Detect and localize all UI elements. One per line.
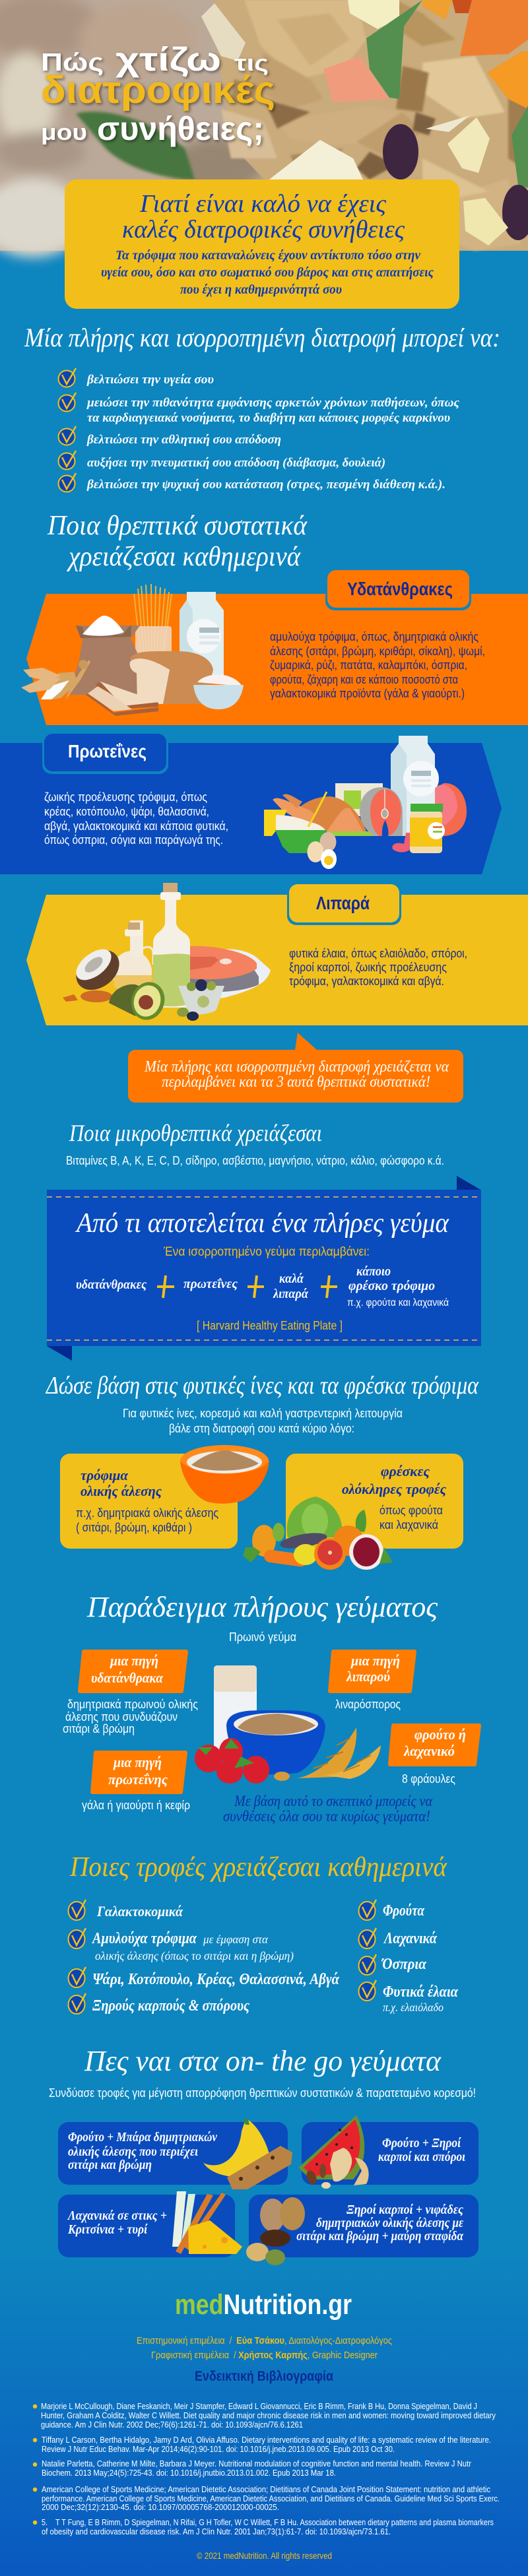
tag: protein source: μια πηγή bbox=[113, 1754, 162, 1770]
card text bbox=[67, 2208, 167, 2237]
text: carbohydrates bbox=[270, 630, 485, 700]
text: protein example: γάλα ή γιαούρτι ή κεφίρ bbox=[82, 1799, 190, 1812]
illustration: fat foods bbox=[63, 883, 271, 1024]
card text: καρποί και σπόροι bbox=[378, 2150, 465, 2164]
label: carbohydrates bbox=[325, 570, 471, 610]
icon: check bbox=[69, 1928, 86, 1948]
title: χτίζω bbox=[116, 41, 221, 78]
item: Ψάρι, Κοτόπουλο, Κρέας, Θαλασσινά, Αβγά bbox=[92, 1971, 340, 1988]
heading: on-the-go meals: Πες ναι στα on- the go γεύματα bbox=[84, 2045, 442, 2077]
panel: why good habits bbox=[65, 179, 459, 309]
ribbon subtitle: Ένα ισορροπημένο γεύμα περιλαμβάνει: bbox=[163, 1245, 370, 1259]
icon: check bbox=[58, 368, 76, 387]
hero photo: cereal flakes with fruit bbox=[0, 0, 528, 257]
panel heading: τρόφιμα bbox=[81, 1467, 129, 1483]
icon: cereal bowl bbox=[180, 1445, 269, 1504]
panel text: όπως φρούτα bbox=[380, 1504, 443, 1517]
footer gradient bbox=[0, 2257, 528, 2576]
panel heading: φρέσκες bbox=[381, 1463, 430, 1479]
panel body text: Τα τρόφιμα που καταναλώνεις έχουν αντίκτυπο τόσο στην bbox=[116, 248, 421, 263]
text: fats: ξηροί καρποί, ζωικής προέλευσης bbox=[289, 961, 447, 974]
text: fibre intro: βάλε στη διατροφή σου κατά κύριο λόγο: bbox=[169, 1422, 354, 1435]
heading: nutrients needed: Ποια θρεπτικά συστατικά bbox=[47, 511, 308, 541]
item: Ξηρούς καρπούς & σπόρους bbox=[92, 1997, 249, 2014]
panel: fats bbox=[26, 883, 528, 1025]
heading: daily foods: Ποιες τροφές χρειάζεσαι καθημερινά bbox=[69, 1852, 447, 1883]
tag: fat source: λιπαρού bbox=[346, 1668, 390, 1685]
heading: nutrients needed bbox=[47, 511, 308, 572]
text: proteins: αβγά, γαλακτοκομικά και κάποια φυτικά, bbox=[44, 820, 228, 833]
icon: check bbox=[69, 1993, 86, 2014]
card text: σιτάρι και βρώμη bbox=[68, 2158, 152, 2172]
item bbox=[86, 396, 460, 425]
panel heading: καλές διατροφικές συνήθειες bbox=[122, 216, 405, 243]
callout: all three nutrients: Μία πλήρης και ισορροπημένη διατροφή χρειάζεται να bbox=[144, 1058, 449, 1076]
card text bbox=[378, 2136, 465, 2164]
panel heading: Γιατί είναι καλό να έχεις bbox=[139, 190, 387, 218]
text: carbohydrates: ζυμαρικά, ρύζι, πατάτα, καλαμπόκι, όσπρια, bbox=[270, 659, 467, 672]
icon: check bbox=[58, 393, 76, 412]
title bbox=[41, 41, 275, 147]
panel: complete meal ribbon bbox=[47, 1176, 481, 1361]
card text: Φρούτο + Ξηροί bbox=[382, 2136, 461, 2150]
text: carbohydrate example: δημητριακά πρωινού ολικής bbox=[67, 1698, 198, 1711]
label: fats bbox=[287, 884, 401, 925]
item bbox=[91, 1930, 294, 1963]
icon: plus bbox=[248, 1275, 264, 1298]
callout: all three nutrients: περιλαμβάνει και τα 3 αυτά θρεπτικά συστατικά! bbox=[162, 1074, 430, 1091]
card: fruit and cereal bar bbox=[58, 2119, 292, 2189]
source note: [ Harvard Healthy Eating Plate ] bbox=[197, 1319, 343, 1332]
panel heading: ολόκληρες τροφές bbox=[342, 1481, 446, 1497]
credits bbox=[137, 2335, 392, 2361]
item: Λαχανικά bbox=[383, 1930, 438, 1947]
panel heading bbox=[81, 1467, 162, 1499]
icon: check bbox=[58, 473, 76, 492]
tag: fruit or vegetable: λαχανικό bbox=[403, 1743, 455, 1759]
credits: Γραφιστική επιμέλεια / Χρήστος Καρπής, Graphic Designer bbox=[151, 2350, 378, 2361]
item: αυξήσει την πνευματική σου απόδοση (διάβασμα, δουλειά) bbox=[87, 456, 385, 470]
tag: fruit or vegetable: φρούτο ή bbox=[414, 1726, 466, 1743]
item: Φυτικά έλαια bbox=[383, 1983, 459, 2001]
icon: check bbox=[58, 451, 76, 470]
text: proteins: ζωικής προέλευσης τρόφιμα, όπως bbox=[44, 790, 207, 804]
card: fruit and nuts bbox=[298, 2115, 478, 2189]
title: τις bbox=[234, 51, 269, 76]
text: proteins: όπως όσπρια, σόγια και παράγωγά της. bbox=[44, 833, 223, 847]
tag: carbohydrate source: μια πηγή bbox=[110, 1652, 158, 1669]
illustration: nuts and flakes bbox=[246, 2197, 305, 2265]
tag: fat source: μια πηγή bbox=[350, 1652, 400, 1669]
ribbon heading: Από τι αποτελείται ένα πλήρες γεύμα bbox=[75, 1208, 449, 1239]
icon: check bbox=[58, 426, 76, 445]
panel text bbox=[380, 1504, 443, 1531]
item: με έμφαση στα bbox=[203, 1933, 269, 1946]
text: carbohydrates: γαλακτοκομικά προϊόντα (γάλα & γιαούρτι.) bbox=[270, 687, 465, 700]
icon: plus bbox=[321, 1275, 337, 1298]
tag: carbohydrate source: υδατάνθρακα bbox=[91, 1669, 164, 1686]
reference 3: Natalie Parletta, Catherine M Milte, Barbara J Meyer. Nutritional modulation of cognitive function and mental health. Review J Nutr bbox=[42, 2459, 472, 2468]
heading: bibliography: Ενδεικτική Βιβλιογραφία bbox=[195, 2369, 333, 2384]
card text: Ξηροί καρποί + νιφάδες bbox=[346, 2203, 463, 2217]
item: Όσπρια bbox=[381, 1956, 427, 1973]
text: fibre intro: Για φυτικές ίνες, κορεσμό και καλή γαστρεντερική λειτουργία bbox=[123, 1407, 403, 1420]
title: διατροφικές bbox=[41, 69, 275, 112]
tag: fat source bbox=[330, 1652, 414, 1691]
item: Φρούτα bbox=[383, 1902, 425, 1919]
note: build all meals bbox=[223, 1793, 433, 1824]
title: συνήθειες; bbox=[97, 110, 264, 147]
term: fresh food: π.χ. φρούτα και λαχανικά bbox=[347, 1297, 449, 1308]
heading: micronutrients: Ποια μικροθρεπτικά χρειάζεσαι bbox=[69, 1120, 322, 1146]
label: proteins bbox=[42, 734, 168, 774]
illustration: vegetables and fruit bbox=[243, 1497, 393, 1570]
text: carbohydrates: φρούτα, ζάχαρη και σε κάποιο ποσοστό στα bbox=[270, 673, 458, 686]
text: proteins bbox=[44, 790, 228, 847]
item: τα καρδιαγγειακά νοσήματα, το διαβήτη και κάποιες μορφές καρκίνου bbox=[87, 411, 450, 425]
item: Γαλακτοκομικά bbox=[96, 1903, 183, 1919]
text: carbohydrates: αμυλούχα τρόφιμα, όπως, δημητριακά ολικής bbox=[270, 630, 478, 643]
text: carbohydrate example: σιτάρι & βρώμη bbox=[63, 1722, 135, 1735]
card text: ολικής άλεσης που περιέχει bbox=[68, 2144, 198, 2159]
references list bbox=[33, 2401, 500, 2536]
illustration: sticks and cheese bbox=[172, 2191, 242, 2254]
reference 1 bbox=[33, 2401, 496, 2430]
term: good fats: καλά bbox=[279, 1272, 304, 1286]
term: fresh food: φρέσκο τρόφιμο bbox=[348, 1279, 435, 1293]
text: carbohydrate example bbox=[63, 1698, 198, 1735]
reference 2 bbox=[33, 2435, 491, 2454]
term: fresh food bbox=[347, 1264, 449, 1308]
title: Πώς bbox=[41, 49, 104, 77]
tag: protein source: πρωτεΐνης bbox=[108, 1771, 168, 1787]
tag: fruit or vegetable bbox=[390, 1725, 479, 1764]
panel: fresh whole foods bbox=[243, 1454, 463, 1570]
icon: check bbox=[359, 1954, 376, 1975]
illustration: banana and bar bbox=[203, 2119, 292, 2189]
tag: protein source bbox=[92, 1753, 185, 1792]
text: on-the-go intro: Συνδύασε τροφές για μέγιστη απορρόφηση θρεπτικών συστατικών & παρατεταμένο κορεσμό! bbox=[49, 2086, 476, 2100]
credits: Επιστημονική επιμέλεια / Εύα Τσάκου, Διαιτολόγος-Διατροφολόγος bbox=[137, 2335, 392, 2346]
note: build all meals: συνθέσεις όλα σου τα κυρίως γεύματα! bbox=[223, 1808, 430, 1824]
panel text bbox=[76, 1506, 218, 1534]
card: nuts, cereal flakes, raisins bbox=[246, 2195, 478, 2265]
text: micronutrients list: Βιταμίνες Β, Α, Κ, Ε, C, D, σίδηρο, ασβέστιο, μαγνήσιο, νάτριο, κάλιο, φώσφορο κ.ά. bbox=[66, 1154, 444, 1167]
panel heading: ολικής άλεσης bbox=[81, 1483, 162, 1499]
reference 2: Review J Nutr Educ Behav. Mar-Apr 2014;46(2):90-101. doi: 10.1016/j.jneb.2013.09.005. Epub 2013 Oct 30. bbox=[42, 2444, 395, 2454]
item: π.χ. ελαιόλαδο bbox=[383, 2001, 444, 2014]
copyright: © 2021 medNutrition. All rights reserved bbox=[197, 2550, 332, 2561]
text: fat example: λιναρόσπορος bbox=[335, 1698, 401, 1711]
item: ολικής άλεσης (όπως το σιτάρι και η βρώμη) bbox=[95, 1949, 294, 1963]
heading: sample meal: Παράδειγμα πλήρους γεύματος bbox=[86, 1591, 438, 1623]
tag: carbohydrate source bbox=[80, 1652, 186, 1691]
text: carbohydrate example: άλεσης που συνδυάζουν bbox=[65, 1710, 178, 1723]
text: fibre intro bbox=[123, 1407, 403, 1435]
panel text: και λαχανικά bbox=[380, 1518, 438, 1531]
reference 3: Biochem. 2013 May;24(5):725-43. doi: 10.1016/j.jnutbio.2013.01.002. Epub 2013 Mar 18. bbox=[42, 2468, 336, 2478]
card text: Κριτσίνια + τυρί bbox=[67, 2222, 148, 2237]
term: carbohydrates: υδατάνθρακες bbox=[76, 1277, 147, 1292]
item: βελτιώσει την ψυχική σου κατάσταση (στρες, πεσμένη διάθεση κ.ά.). bbox=[86, 478, 446, 492]
label: fats: Λιπαρά bbox=[316, 893, 370, 913]
card: vegetable sticks, breadsticks, cheese bbox=[58, 2191, 242, 2257]
reference 4: 2000 Dec;32(12):2130-45. doi: 10.1097/00005768-200012000-00025. bbox=[42, 2502, 279, 2512]
term: proteins: πρωτεΐνες bbox=[183, 1277, 238, 1291]
panel: proteins bbox=[0, 734, 502, 874]
reference 1: guidance. Am J Clin Nutr. 2002 Dec;76(6):1261-71. doi: 10.1093/ajcn/76.6.1261 bbox=[41, 2420, 303, 2430]
panel body text: που έχει η καθημερινότητά σου bbox=[180, 282, 342, 297]
term: fresh food: κάποιο bbox=[356, 1264, 391, 1279]
panel heading bbox=[122, 190, 405, 243]
checklist: daily foods left bbox=[69, 1900, 340, 2014]
heading: nutrients needed: χρειάζεσαι καθημερινά bbox=[66, 542, 301, 572]
title: μου bbox=[41, 120, 87, 145]
card text: Λαχανικά σε στικς + bbox=[67, 2208, 167, 2223]
icon: check bbox=[359, 1980, 376, 2001]
card text: Φρούτο + Μπάρα δημητριακών bbox=[68, 2130, 218, 2144]
text: carbohydrates: άλεσης (σιτάρι, βρώμη, κριθάρι, σίκαλη), ψωμί, bbox=[270, 645, 485, 658]
text: fats: τρόφιμα, γαλακτοκομικά και αβγά. bbox=[289, 975, 444, 988]
panel: carbohydrates bbox=[21, 570, 528, 725]
panel body text: υγεία σου, όσο και στο σωματικό σου βάρος και στις απαιτήσεις bbox=[101, 265, 434, 280]
term: good fats bbox=[273, 1272, 309, 1301]
checklist: daily foods right bbox=[359, 1900, 459, 2014]
icon: plus bbox=[157, 1275, 174, 1298]
text: breakfast: Πρωινό γεύμα bbox=[229, 1630, 296, 1644]
item: βελτιώσει την υγεία σου bbox=[86, 373, 214, 387]
panel text: π.χ. δημητριακά ολικής άλεσης bbox=[76, 1506, 218, 1520]
text: proteins: κρέας, κοτόπουλο, ψάρι, θαλασσινά, bbox=[44, 805, 209, 818]
panel text: ( σιτάρι, βρώμη, κριθάρι ) bbox=[76, 1521, 192, 1534]
text: fruit example: 8 φράουλες bbox=[402, 1772, 455, 1786]
term: good fats: λιπαρά bbox=[273, 1287, 309, 1301]
card text bbox=[68, 2130, 218, 2172]
label: carbohydrates: Υδατάνθρακες bbox=[347, 579, 453, 599]
checklist: benefits bbox=[58, 368, 460, 492]
card text bbox=[296, 2203, 464, 2243]
reference 3 bbox=[33, 2459, 472, 2478]
illustration: protein foods bbox=[264, 736, 467, 869]
card text: δημητριακών ολικής άλεσης με bbox=[316, 2216, 464, 2230]
illustration: breakfast bbox=[195, 1665, 381, 1784]
reference 5 bbox=[33, 2517, 494, 2536]
item: βελτιώσει την αθλητική σου απόδοση bbox=[86, 433, 281, 447]
item bbox=[383, 1983, 459, 2014]
callout: all three nutrients bbox=[128, 1033, 463, 1103]
text: fats: φυτικά έλαια, όπως ελαιόλαδο, σπόροι, bbox=[289, 947, 467, 960]
label: proteins: Πρωτεΐνες bbox=[68, 741, 147, 761]
panel heading bbox=[342, 1463, 446, 1497]
panel body text bbox=[101, 248, 434, 297]
icon: check bbox=[69, 1900, 86, 1920]
item: μειώσει την πιθανότητα εμφάνισης αρκετών χρόνιων παθήσεων, όπως bbox=[86, 396, 460, 410]
text: fats bbox=[289, 947, 467, 988]
reference 5: of obesity and cardiovascular disease risk. Am J Clin Nutr. 2001 Jan;73(1):61-7. doi: 10.1093/ajcn/73.1.61. bbox=[42, 2527, 391, 2536]
logo: medNutrition.gr: medNutrition.gr bbox=[175, 2289, 352, 2321]
illustration: watermelon and nuts bbox=[298, 2115, 369, 2189]
panel: whole grains bbox=[60, 1445, 269, 1549]
note: build all meals: Με βάση αυτό το σκεπτικό μπορείς να bbox=[234, 1793, 433, 1809]
card text: σιτάρι και βρώμη + μαύρη σταφίδα bbox=[296, 2229, 464, 2243]
reference 4 bbox=[33, 2484, 500, 2512]
icon: check bbox=[69, 1967, 86, 1987]
icon: check bbox=[359, 1928, 376, 1948]
item: Αμυλούχα τρόφιμα bbox=[91, 1930, 197, 1947]
icon: check bbox=[359, 1900, 376, 1920]
illustration: carbohydrate foods bbox=[21, 584, 244, 716]
